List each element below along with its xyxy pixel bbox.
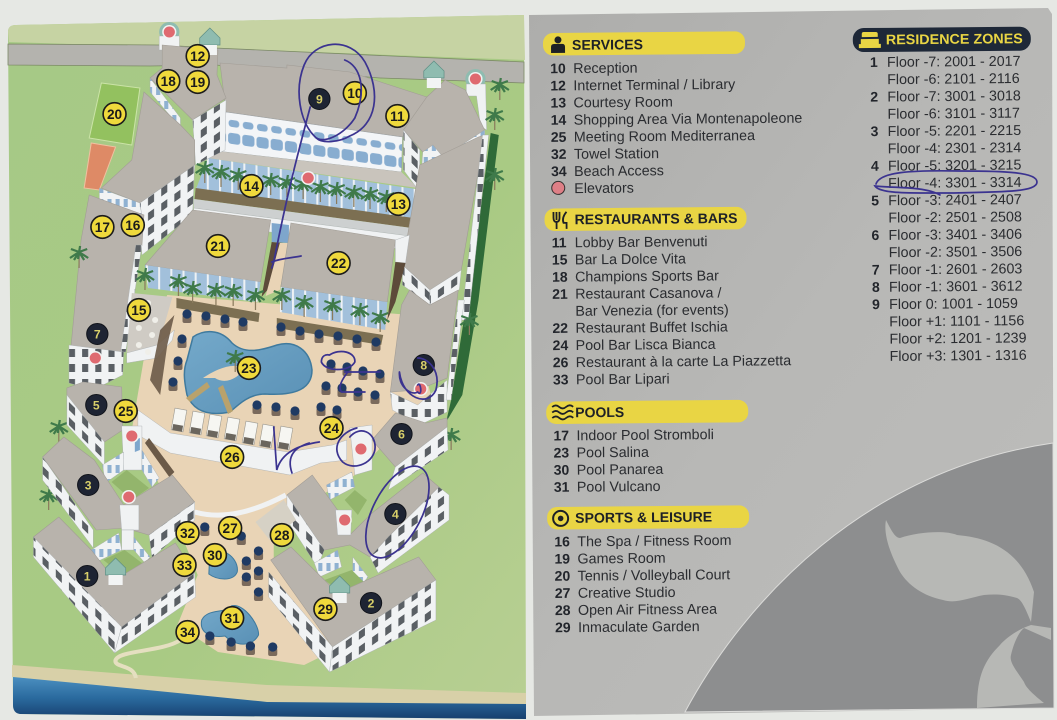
sports heading pill bbox=[547, 505, 749, 530]
main pool area bbox=[168, 309, 385, 450]
services list: 32 bbox=[551, 146, 567, 162]
umbrellas near south pools bbox=[200, 522, 277, 656]
map base card bbox=[8, 15, 526, 719]
sports list: The Spa / Fitness Room bbox=[577, 533, 732, 550]
sports list: 28 bbox=[555, 602, 571, 618]
icon: ball bbox=[553, 511, 568, 526]
residence list: 2 bbox=[870, 89, 878, 105]
restaurants list: 26 bbox=[553, 354, 569, 370]
residence list: Floor -3: 2401 - 2407 bbox=[888, 192, 1022, 209]
residence list: Floor -1: 3601 - 3612 bbox=[889, 279, 1023, 296]
residence list: Floor -1: 2601 - 2603 bbox=[889, 261, 1022, 278]
residence list: Floor -4: 3301 - 3314 bbox=[888, 175, 1022, 192]
yellow numbered facility markers: 11 bbox=[390, 109, 405, 124]
building: 5 bbox=[67, 382, 174, 487]
courtyard 6-4 bbox=[345, 490, 367, 515]
restaurants list: 21 bbox=[552, 286, 568, 302]
sports list: Games Room bbox=[577, 551, 666, 567]
yellow numbered facility markers: 34 bbox=[180, 625, 196, 640]
elevator markers bbox=[88, 25, 483, 527]
dark numbered residence markers: 9 bbox=[316, 93, 323, 106]
pool 31 bbox=[201, 606, 259, 644]
domes bbox=[105, 28, 444, 603]
residence list: Floor -6: 3101 - 3117 bbox=[887, 106, 1020, 123]
services list: 12 bbox=[550, 77, 566, 93]
restaurants list: Restaurant Casanova / bbox=[575, 285, 722, 303]
right panel: legend card bbox=[529, 8, 1054, 716]
residence list: Floor -7: 3001 - 3018 bbox=[887, 88, 1021, 105]
tennis court bbox=[89, 83, 140, 145]
sports list: Tennis / Volleyball Court bbox=[578, 567, 730, 585]
yellow numbered facility markers: 16 bbox=[125, 218, 141, 233]
services list bbox=[550, 58, 803, 197]
building: 1 bbox=[33, 517, 196, 653]
services list: Beach Access bbox=[574, 163, 664, 180]
pool 23 bbox=[184, 332, 312, 414]
yellow numbered facility markers: 20 bbox=[107, 107, 122, 122]
pools heading pill bbox=[546, 400, 748, 424]
building: 6 bbox=[326, 413, 448, 500]
services list: 25 bbox=[551, 129, 567, 145]
residence list: Floor -6: 2101 - 2116 bbox=[887, 71, 1020, 88]
services list: 10 bbox=[550, 60, 566, 76]
residence list: Floor -2: 2501 - 2508 bbox=[888, 209, 1022, 227]
yellow numbered facility markers: 23 bbox=[241, 361, 257, 376]
handwritten pen annotations on map bbox=[272, 44, 442, 567]
residence list: Floor +3: 1301 - 1316 bbox=[890, 348, 1027, 365]
logo leaf top bbox=[885, 520, 1034, 622]
left panel: resort map bbox=[8, 15, 526, 719]
dark quarter-circle corner bbox=[685, 443, 1054, 712]
residence list: 4 bbox=[871, 158, 879, 174]
pools list: Indoor Pool Stromboli bbox=[576, 427, 714, 444]
entrance bbox=[266, 223, 289, 296]
sports list: Open Air Fitness Area bbox=[578, 602, 717, 619]
logo leaf bottom bbox=[977, 625, 1051, 708]
pools heading text: POOLS bbox=[575, 404, 624, 420]
dark numbered residence markers: 6 bbox=[398, 428, 405, 441]
left legend column bbox=[543, 31, 807, 636]
building: north wing bbox=[194, 63, 427, 250]
restaurants list: 11 bbox=[552, 234, 567, 250]
yellow numbered facility markers: 26 bbox=[225, 450, 240, 465]
restaurants list: Lobby Bar Benvenuti bbox=[575, 234, 708, 251]
sun loungers bbox=[171, 408, 293, 450]
south plaza curved wall bbox=[195, 495, 286, 515]
palms bbox=[40, 78, 509, 510]
restaurants list: Pool Bar Lisca Bianca bbox=[576, 337, 716, 354]
dark numbered residence markers: 2 bbox=[368, 597, 375, 610]
yellow numbered facility markers: 32 bbox=[180, 526, 196, 541]
pools list: Pool Salina bbox=[576, 445, 649, 461]
dark numbered residence markers: 1 bbox=[84, 570, 91, 583]
pool wall bbox=[138, 410, 347, 475]
residence list: 5 bbox=[871, 192, 879, 208]
residence list: 9 bbox=[872, 296, 880, 312]
north grass and sand band bbox=[8, 15, 525, 60]
restaurants list: Champions Sports Bar bbox=[575, 268, 719, 286]
pools list: 30 bbox=[554, 462, 570, 478]
yellow numbered facility markers: 15 bbox=[131, 303, 147, 318]
pool 30 bbox=[209, 551, 237, 579]
restaurants list: 22 bbox=[552, 320, 568, 336]
pools list: 31 bbox=[554, 479, 570, 495]
building: west wing with tower 20 side bbox=[99, 92, 195, 255]
residence list: Floor -5: 3201 - 3215 bbox=[888, 157, 1022, 175]
yellow numbered facility markers: 33 bbox=[177, 558, 193, 573]
terrace planters bbox=[127, 293, 383, 395]
residence list: 1 bbox=[870, 54, 878, 70]
building: east wing bbox=[402, 135, 489, 320]
dark numbered residence markers: 7 bbox=[94, 328, 101, 341]
yellow numbered facility markers bbox=[91, 45, 410, 643]
icon: person bbox=[551, 36, 565, 53]
yellow numbered facility markers: 31 bbox=[225, 611, 240, 626]
yellow numbered facility markers: 18 bbox=[161, 74, 176, 89]
plaza paving bbox=[132, 295, 431, 665]
umbrellas around main pool bbox=[168, 309, 385, 420]
services list: Courtesy Room bbox=[573, 95, 673, 111]
services list: Towel Station bbox=[574, 146, 659, 163]
section: sports and leisure bbox=[547, 505, 750, 636]
beach strip bbox=[12, 665, 526, 705]
yellow numbered facility markers: 19 bbox=[190, 75, 206, 90]
pools list: Pool Vulcano bbox=[577, 479, 661, 496]
sports list: 16 bbox=[554, 533, 570, 549]
dark numbered residence markers: 5 bbox=[93, 399, 100, 412]
restaurants list: 33 bbox=[553, 371, 569, 387]
sports list bbox=[554, 532, 732, 636]
restaurants list bbox=[552, 232, 791, 388]
yellow numbered facility markers: 25 bbox=[118, 404, 134, 419]
restaurants list: Bar La Dolce Vita bbox=[575, 251, 686, 268]
yellow numbered facility markers: 27 bbox=[223, 521, 238, 536]
section: restaurants and bars bbox=[544, 206, 791, 389]
restaurants list: Restaurant Buffet Ischia bbox=[575, 319, 728, 337]
residence list bbox=[870, 53, 1027, 365]
sports list: 20 bbox=[555, 568, 570, 584]
sports heading text: SPORTS & LEISURE bbox=[575, 509, 712, 526]
beach path bbox=[115, 640, 180, 678]
sports list: 29 bbox=[555, 619, 571, 635]
restaurants list: 15 bbox=[552, 251, 568, 268]
sports list: 19 bbox=[554, 551, 570, 567]
dark numbered residence markers: 8 bbox=[420, 359, 427, 372]
courtyard 5-3 bbox=[112, 470, 149, 500]
services list: Shopping Area Via Montenapoleone bbox=[574, 111, 802, 129]
icon: waves bbox=[552, 405, 573, 419]
dark numbered residence markers: 3 bbox=[85, 479, 92, 492]
pools list: Pool Panarea bbox=[577, 462, 663, 479]
residence list: Floor -7: 2001 - 2017 bbox=[887, 54, 1021, 71]
bar 15 terrace bbox=[136, 300, 158, 355]
sports list: 27 bbox=[555, 585, 571, 601]
pools list: 17 bbox=[553, 427, 569, 443]
steps bbox=[255, 500, 296, 540]
restaurants list: 24 bbox=[553, 337, 568, 353]
yellow numbered facility markers: 30 bbox=[207, 548, 223, 563]
building: northwest tower bbox=[150, 22, 226, 165]
yellow numbered facility markers: 29 bbox=[318, 602, 333, 617]
building: east lower wing 8 bbox=[390, 290, 464, 425]
courtyard 3-1 bbox=[103, 550, 142, 577]
services list: Meeting Room Mediterranea bbox=[574, 128, 755, 146]
yellow numbered facility markers: 21 bbox=[210, 239, 226, 254]
services list: 14 bbox=[551, 112, 567, 128]
residence list: 3 bbox=[871, 123, 879, 139]
pools list bbox=[553, 426, 714, 496]
residence list: 8 bbox=[872, 279, 880, 295]
yellow numbered facility markers: 14 bbox=[244, 179, 259, 194]
restaurants list: 18 bbox=[552, 269, 568, 285]
residence heading pill bbox=[853, 27, 1031, 52]
residence list: 7 bbox=[872, 262, 880, 278]
yellow numbered facility markers: 13 bbox=[391, 197, 406, 212]
yellow numbered facility markers: 22 bbox=[331, 256, 347, 271]
yellow numbered facility markers: 12 bbox=[190, 49, 206, 64]
services heading pill bbox=[543, 31, 745, 56]
dark numbered residence markers: 4 bbox=[392, 508, 399, 521]
residence list: 6 bbox=[871, 227, 880, 243]
icon: bed bbox=[859, 32, 881, 48]
restaurants list: Bar Venezia (for events) bbox=[575, 302, 729, 320]
building: 4 bbox=[287, 473, 449, 583]
yellow numbered facility markers: 17 bbox=[95, 220, 110, 235]
services list: Reception bbox=[573, 61, 638, 77]
building: 2 bbox=[269, 547, 436, 672]
services list: Elevators bbox=[574, 181, 634, 197]
services list: 34 bbox=[551, 163, 567, 179]
yellow numbered facility markers: 10 bbox=[347, 86, 362, 101]
building: restaurants 21 bbox=[145, 210, 284, 302]
yellow numbered facility markers: 28 bbox=[274, 528, 290, 543]
map front buildings and markers bbox=[33, 25, 509, 672]
sea bbox=[13, 677, 526, 719]
section: residence zones bbox=[853, 27, 1034, 365]
restaurants heading pill bbox=[544, 207, 747, 231]
residence list: Floor -2: 3501 - 3506 bbox=[889, 244, 1022, 261]
residence list: Floor -4: 2301 - 2314 bbox=[888, 140, 1021, 157]
residence list: Floor -5: 2201 - 2215 bbox=[888, 123, 1021, 140]
building: west long wing bbox=[69, 195, 144, 390]
residence list: Floor +1: 1101 - 1156 bbox=[889, 313, 1024, 330]
services list: Internet Terminal / Library bbox=[573, 77, 736, 94]
map ground and rear buildings bbox=[69, 22, 499, 678]
building: northeast tower bbox=[403, 69, 487, 192]
restaurants heading text: RESTAURANTS & BARS bbox=[574, 210, 738, 227]
volleyball court bbox=[84, 143, 116, 190]
sports list: Inmaculate Garden bbox=[578, 619, 700, 636]
residence list: Floor +2: 1201 - 1239 bbox=[889, 330, 1027, 348]
residence heading text: RESIDENCE ZONES bbox=[886, 30, 1023, 47]
pools list: 23 bbox=[553, 444, 569, 461]
yellow numbered facility markers: 24 bbox=[324, 421, 340, 436]
residence list: Floor -3: 3401 - 3406 bbox=[888, 227, 1022, 244]
sports list: Creative Studio bbox=[578, 585, 676, 602]
courtyard 4-2 bbox=[324, 570, 365, 597]
restaurants list: Pool Bar Lipari bbox=[576, 371, 670, 388]
handwritten circle on room list bbox=[875, 171, 1037, 195]
icon: cutlery bbox=[553, 212, 567, 229]
dark numbered residence markers bbox=[77, 88, 434, 614]
services list: 13 bbox=[550, 94, 566, 111]
section: pools bbox=[546, 400, 749, 496]
services heading text: SERVICES bbox=[572, 36, 643, 53]
residence list: Floor 0: 1001 - 1059 bbox=[889, 296, 1018, 313]
section: services bbox=[543, 31, 803, 197]
building: restaurants 22 bbox=[280, 223, 410, 330]
right hedge bbox=[446, 133, 499, 422]
building: 3 bbox=[43, 437, 195, 563]
access road bbox=[8, 44, 524, 83]
legend card base bbox=[529, 8, 1054, 716]
restaurants list: Restaurant à la carte La Piazzetta bbox=[576, 353, 791, 371]
